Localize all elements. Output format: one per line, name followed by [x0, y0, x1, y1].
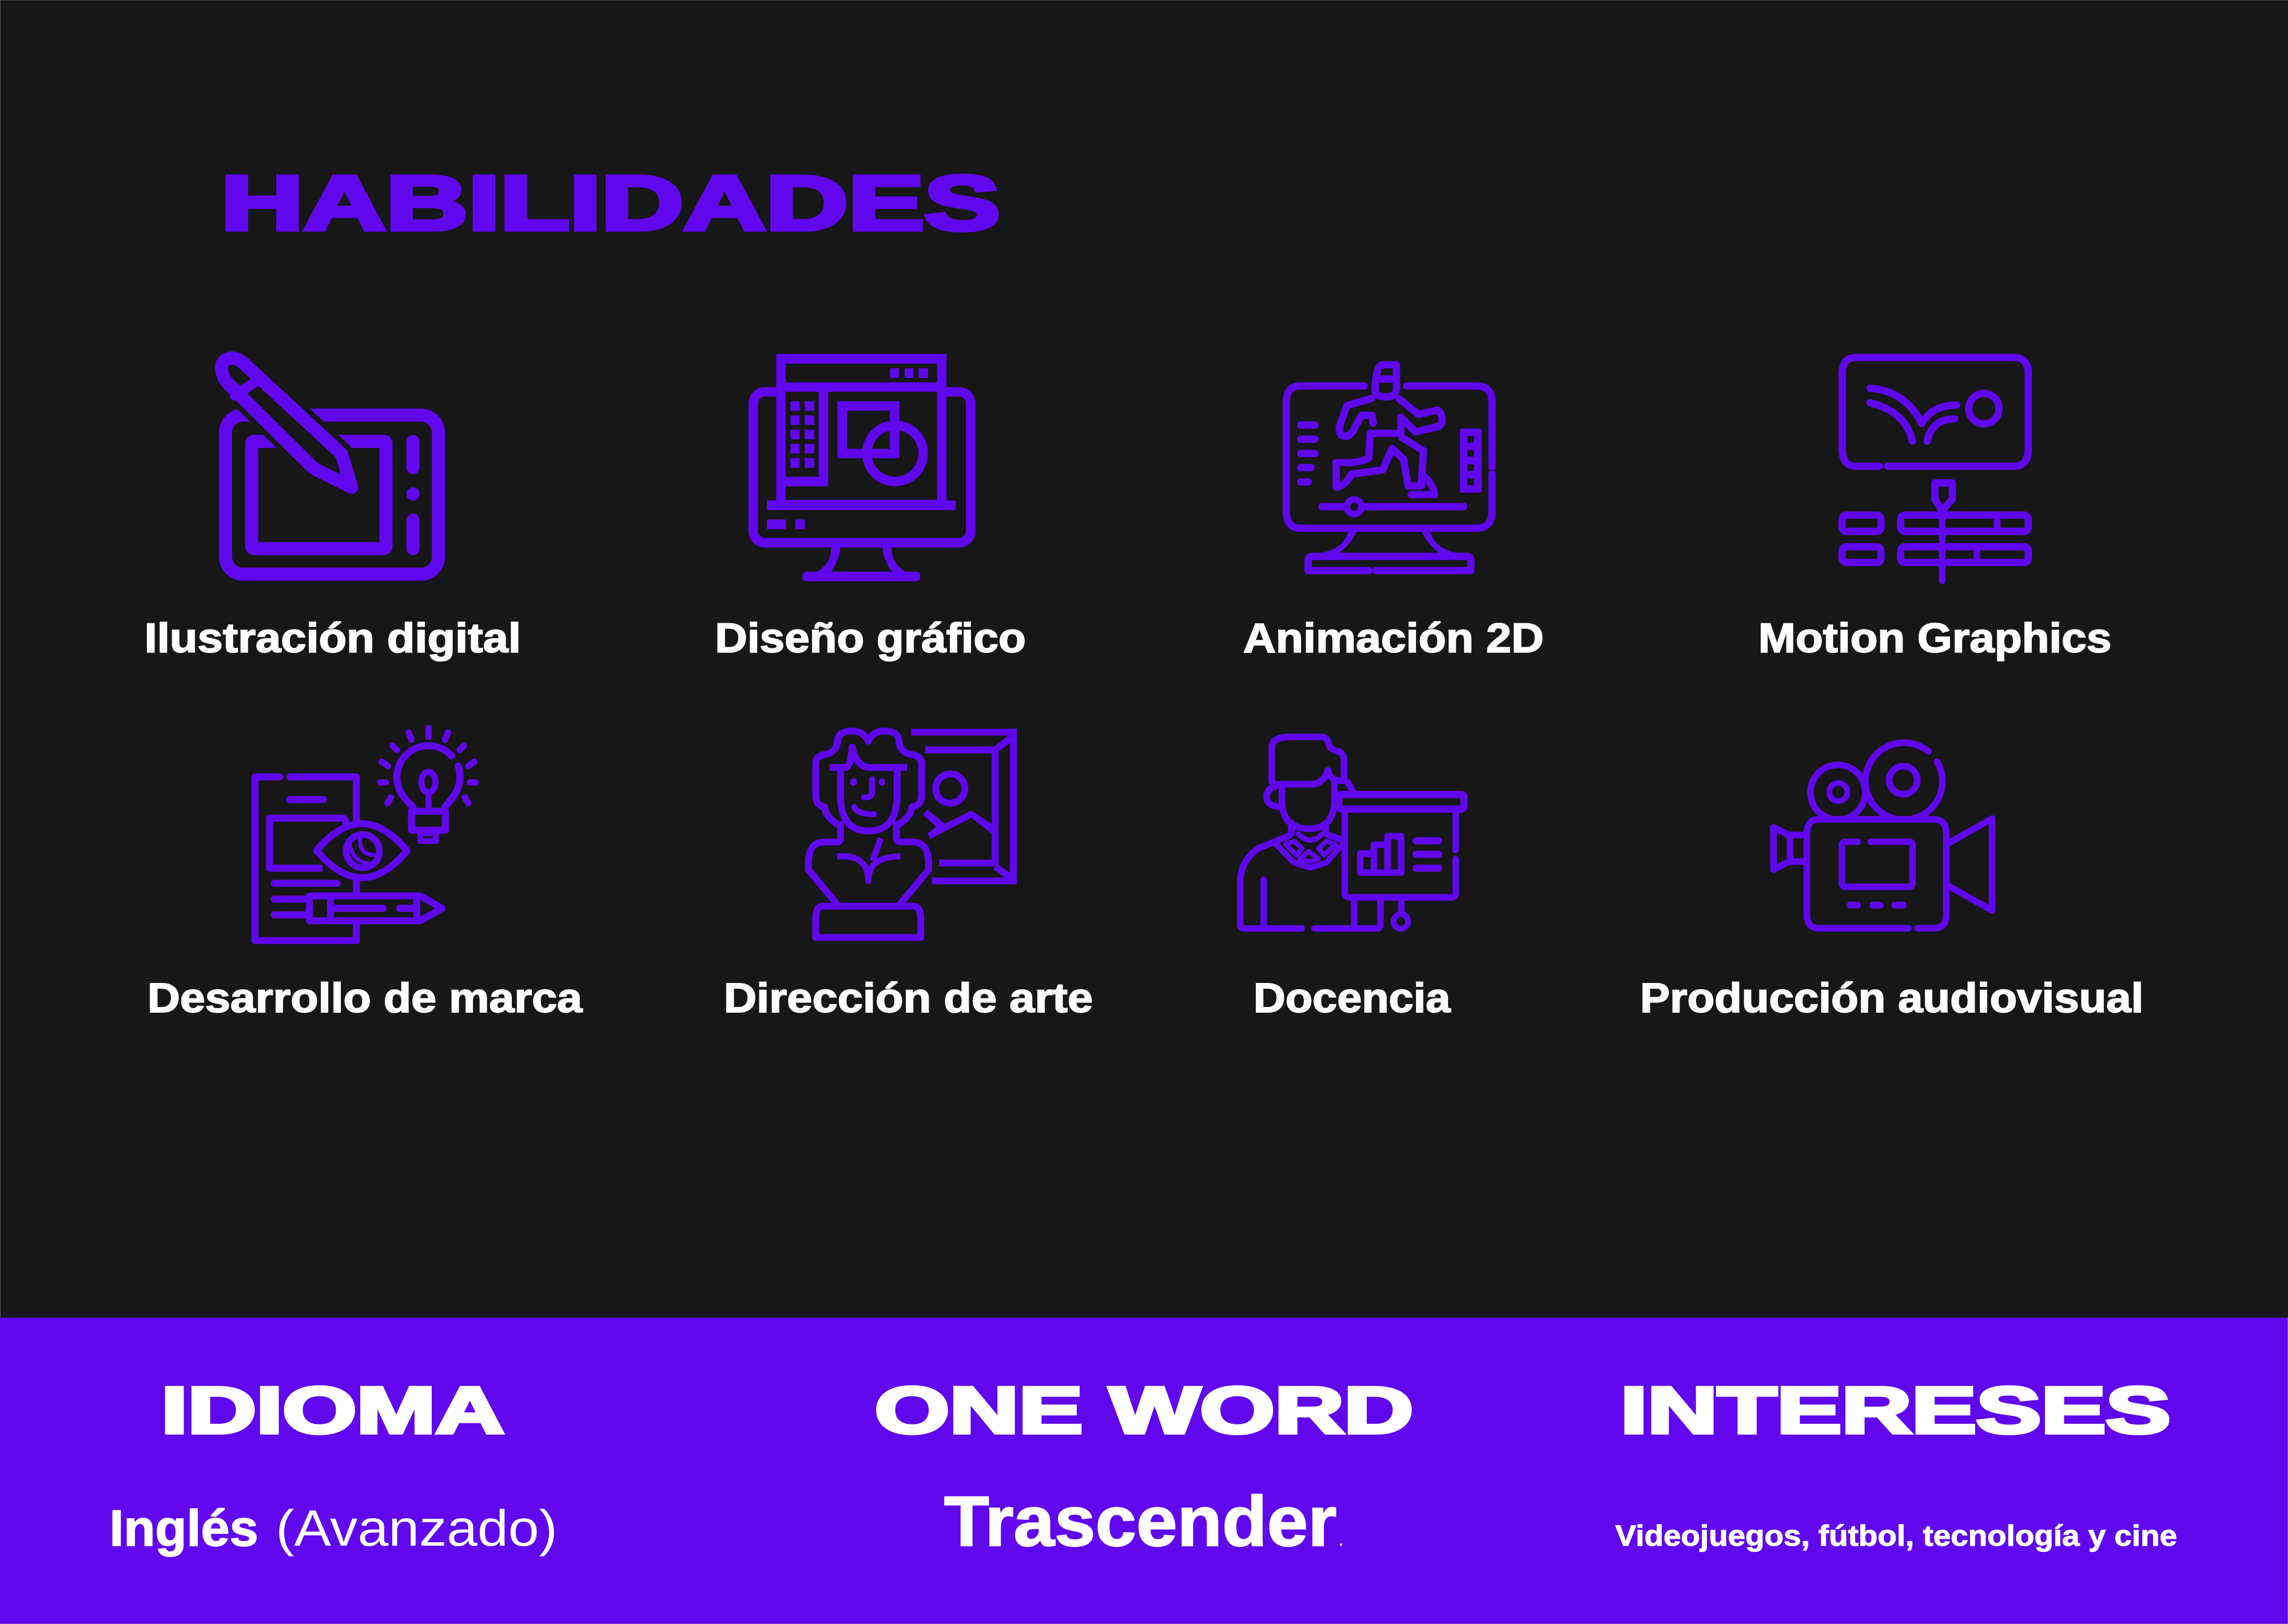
label: Producción audiovisual: Producción audiovisual	[1640, 975, 2143, 1021]
text: language level: Inglés	[109, 1499, 258, 1557]
icon: motion graphics screen and timeline	[1842, 357, 2028, 581]
icon: monitor with graphic design software	[753, 354, 970, 581]
label: Ilustración digital: Ilustración digital	[145, 615, 521, 662]
icon: brand development	[255, 728, 476, 941]
label: Dirección de arte: Dirección de arte	[724, 975, 1093, 1021]
text: language level: (Avanzado)	[276, 1499, 558, 1557]
label: Docencia: Docencia	[1254, 975, 1451, 1021]
text: interests list: Videojuegos, fútbol, tecnología y cine	[1615, 1519, 2177, 1552]
heading: Intereses: INTERESES	[1621, 1374, 2171, 1447]
label: Diseño gráfico: Diseño gráfico	[715, 615, 1026, 662]
icon: 2D animated runner on monitor	[1286, 365, 1492, 571]
heading: Idioma: IDIOMA	[161, 1374, 504, 1447]
label: Motion Graphics: Motion Graphics	[1758, 615, 2111, 662]
icon: film camera	[1773, 743, 1992, 928]
heading: One word: ONE WORD	[875, 1374, 1413, 1447]
icon: teacher with presentation board	[1240, 737, 1464, 929]
label: Animación 2D: Animación 2D	[1243, 615, 1544, 662]
icon: drawing tablet and pen	[221, 358, 439, 574]
text: Trascender: .	[1338, 1527, 1344, 1550]
label: Desarrollo de marca: Desarrollo de marca	[148, 975, 583, 1021]
icon: art direction bust and framed picture	[809, 731, 1013, 937]
text: language level	[109, 1499, 558, 1557]
panel: footer	[0, 1317, 2288, 1624]
title: HABILIDADES	[221, 160, 1000, 246]
footer background	[0, 1317, 2288, 1624]
text: Trascender: Trascender	[944, 1482, 1336, 1561]
